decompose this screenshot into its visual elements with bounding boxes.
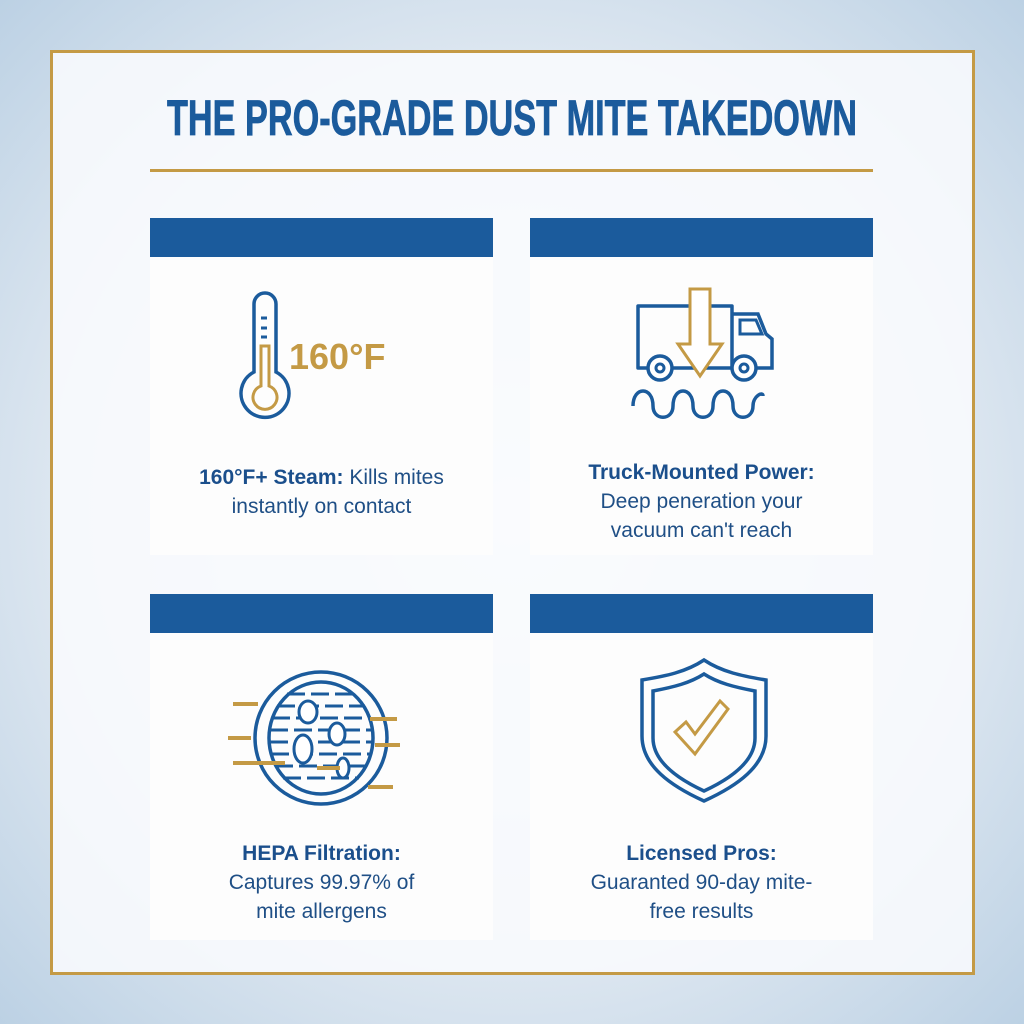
title underline [150,169,873,172]
icon: truck with arrow [631,288,774,419]
text: truck: vacuum can't reach [611,519,792,542]
text: HEPA: mite allergens [256,900,387,923]
text: steam: 160°F+ Steam: Kills mites [199,466,444,489]
text: licensed pros: Guaranted 90-day mite- [591,871,812,894]
text: licensed pros: free results [650,900,753,923]
icon: shield [640,658,768,803]
panel: licensed pros [530,594,873,940]
panel: steam [150,218,493,555]
text: licensed pros [591,842,812,923]
icon: thermometer: 160°F [289,336,385,377]
text: HEPA: HEPA Filtration: [242,842,401,865]
text: truck: Deep peneration your [600,490,802,513]
text: steam: instantly on contact [232,495,411,518]
panel: HEPA [150,594,493,940]
panel: truck [530,218,873,555]
text: steam [199,466,444,518]
text: truck: Truck-Mounted Power: [588,461,815,484]
text: licensed pros: Licensed Pros: [626,842,777,865]
text: truck [588,461,815,542]
text: HEPA [229,842,414,923]
icon: HEPA filter [228,670,400,806]
icon: thermometer [239,291,385,420]
text: HEPA: Captures 99.97% of [229,871,414,894]
